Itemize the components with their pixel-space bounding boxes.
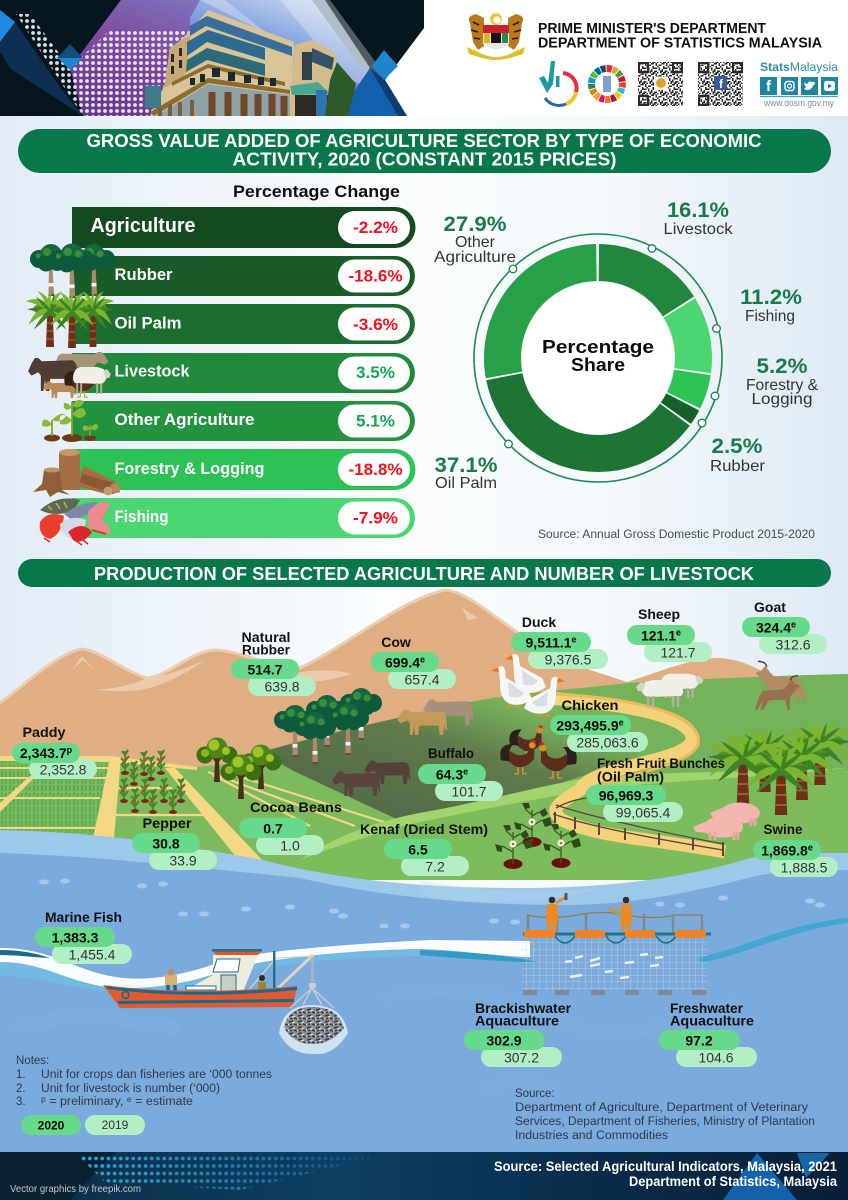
data: kenaf [360,821,488,876]
title band: gross value added [18,129,831,173]
data: freshwater aquaculture: 97.2 [685,1032,713,1048]
data: kenaf: 7.2 [425,858,445,874]
data: goat: 312.6 [775,636,811,652]
heading: percentage change: Percentage Change [233,183,400,201]
social media block [760,62,839,109]
data: duck: Duck [522,614,556,630]
data: buffalo: Buffalo [428,745,474,761]
winding farm road [547,698,725,852]
panel: percentage change bars [24,207,415,545]
vector credit: Vector graphics by freepik.com [10,1184,141,1195]
notes: e [127,1095,132,1104]
label: other agriculture share [434,213,516,266]
river bank [0,830,848,1160]
light foreground meadow [285,770,848,880]
data: freshwater aquaculture [659,1000,757,1067]
data: paddy: 2,352.8 [40,762,87,778]
source: departments: Source: [515,1088,555,1100]
water bubbles [39,878,825,928]
label: fishing share: Fishing [745,308,795,325]
data: fresh fruit bunches: 99,065.4 [616,804,670,820]
bar: other agriculture: Other Agriculture [114,410,254,429]
landscape illustration [0,590,848,1160]
source: departments: Industries and Commodities [515,1130,668,1142]
data: cow: Cow [381,634,411,650]
illustration: fence [553,798,723,856]
QR code: facebook: f [719,77,724,91]
label: rubber share [710,435,766,475]
data: buffalo: 64.3 [436,766,463,782]
icon: farm animals [28,352,111,398]
illustration: chickens [500,725,577,778]
data: cow: 699.4 [385,654,420,670]
data: duck: 9,511.1 [526,634,571,650]
label: other agriculture share: Other [455,234,496,251]
bar: fishing [40,498,415,545]
footer source text: Department of Statistics, Malaysia [629,1174,837,1189]
data: duck: e [571,634,576,644]
data: goat: e [791,620,796,630]
title band: gross value added: ACTIVITY, 2020 (CONSTANT 2015 PRICES) [232,150,616,170]
data: fresh fruit bunches: 96,969.3 [599,788,653,804]
data: goat: 324.4 [756,620,791,636]
notes: = estimate [132,1096,193,1108]
label: forestry and logging share [746,355,818,408]
data: pepper: 30.8 [152,836,180,852]
notes: 3. [16,1096,26,1108]
source: departments: Department of Agriculture, Department of Veterinary [515,1102,808,1114]
data: natural rubber: 514.7 [247,662,283,678]
donut centre label [542,337,654,375]
data: brackishwater aquaculture [464,1000,572,1067]
notes [16,1055,272,1108]
label: rubber share: 2.5% [712,435,763,458]
legend: years: 2019 [102,1118,129,1132]
bar: other agriculture [42,400,415,442]
data: sheep: 121.7 [660,644,696,660]
data: natural rubber [231,629,316,696]
shaded hillside [262,698,647,822]
data: sheep [627,606,712,662]
logo: statistics mark [539,61,577,105]
data: duck [511,614,608,669]
notes: = preliminary, [46,1096,127,1108]
notes: 2. [16,1083,26,1095]
label: other agriculture share: Agriculture [434,249,516,266]
data: buffalo: e [463,766,468,776]
illustration: goats [755,661,807,710]
data: pepper [132,815,217,870]
data: freshwater aquaculture: Aquaculture [670,1012,754,1028]
label: oil palm share [434,454,498,492]
data: natural rubber: Natural [242,629,290,645]
title band: production [18,559,831,587]
illustration: cows [397,700,473,735]
bar: fishing: -7.9% [353,508,398,528]
footer band [0,1152,848,1200]
notes: Unit for crops dan fisheries are ‘000 tonnes [41,1069,272,1081]
bar: livestock [28,352,415,398]
illustration: ducks [491,654,565,716]
data: pepper: Pepper [142,815,192,831]
bar: fishing: Fishing [114,507,168,526]
bar: rubber [30,244,415,298]
data: duck: 9,376.5 [545,652,592,668]
QR code: facebook [698,62,743,106]
icon: fish and seafood [40,498,110,545]
social media block: f [766,78,772,95]
label: livestock share: 16.1% [667,199,729,222]
QR code: website [638,62,683,106]
data: freshwater aquaculture: 104.6 [698,1050,734,1066]
data: marine fish [35,909,132,964]
data: chicken: e [619,718,624,728]
bar: forestry and logging: -18.8% [348,460,402,479]
data: marine fish: 1,455.4 [69,946,116,962]
data: chicken: Chicken [562,697,618,713]
label: forestry and logging share: Logging [752,391,812,408]
icon: rubber trees [30,244,115,298]
illustration: oil palm trees [702,717,848,815]
data: kenaf: 6.5 [408,842,428,858]
bar: livestock: Livestock [114,362,190,380]
label: forestry and logging share: Forestry & [746,377,818,394]
data: swine [753,821,838,877]
donut centre label: Share [571,355,625,375]
illustration: net of fish [279,983,348,1054]
bar: other agriculture: 5.1% [356,412,395,430]
data: cocoa beans: Cocoa Beans [250,799,342,815]
label: forestry and logging share: 5.2% [756,355,808,378]
data: marine fish: 1,383.3 [52,930,99,946]
icon: tree stumps and logs [33,449,120,497]
mountains [0,590,848,790]
data: sheep: e [676,628,681,638]
bar: rubber: Rubber [114,265,173,284]
data: swine: 1,888.5 [781,860,828,876]
data: pepper: 33.9 [169,852,197,868]
label: livestock share [664,199,734,238]
water [0,853,848,1160]
label: rubber share: Rubber [710,458,766,475]
illustration: buffalo [332,761,410,796]
bar: agriculture: -2.2% [353,218,398,237]
icon: oil palms [24,288,116,348]
building photo [145,10,356,116]
data: kenaf: Kenaf (Dried Stem) [360,821,488,837]
bar: forestry and logging: Forestry & Logging [114,459,264,478]
data: fresh fruit bunches: Fresh Fruit Bunches [597,755,725,771]
notes: 1. [16,1069,26,1081]
icon: seedlings [42,400,98,442]
data: brackishwater aquaculture: Brackishwater [475,1000,572,1016]
data: paddy: Paddy [22,724,66,740]
bar: oil palm: -3.6% [353,315,398,334]
data: paddy [12,724,97,779]
legend: years: 2020 [38,1118,65,1132]
notes: Unit for livestock is number (‘000) [41,1083,220,1095]
data: cocoa beans: 0.7 [263,820,283,836]
label: fishing share [740,286,802,325]
data: brackishwater aquaculture: 307.2 [504,1050,539,1066]
data: swine: Swine [764,821,803,837]
illustration: swine [693,802,760,840]
data: goat [742,599,827,654]
data: fresh fruit bunches: (Oil Palm) [597,768,664,784]
label: other agriculture share: 27.9% [444,213,507,236]
social media block: StatsMalaysia [760,62,839,74]
data: cocoa beans [239,799,342,855]
data: chicken [550,697,648,752]
department name: DEPARTMENT OF STATISTICS MALAYSIA [538,34,822,52]
donut centre label: Percentage [542,337,654,357]
banner geometric backdrop [0,0,424,116]
data: brackishwater aquaculture: 302.9 [486,1032,522,1048]
source: departments: Services, Department of Fisheries, Ministry of Plantation [515,1116,815,1128]
label: oil palm share: 37.1% [434,454,498,477]
illustration: kenaf plants [495,803,581,869]
logo: SDG wheel [592,68,622,100]
data: sheep: 121.1 [641,628,676,644]
notes: Notes: [16,1055,49,1067]
green hills [267,674,848,880]
label: oil palm share: Oil Palm [435,475,497,492]
legend: years [21,1115,145,1135]
illustration: aquaculture cage [522,893,711,995]
data: chicken: 285,063.6 [576,734,639,750]
label: fishing share: 11.2% [740,286,802,309]
bar: oil palm: Oil Palm [114,314,182,332]
crest [467,13,525,60]
illustration: sheep [636,674,703,707]
social media block: www.dosm.gov.my [763,98,834,109]
label: livestock share: Livestock [664,221,734,238]
data: brackishwater aquaculture: Aquaculture [475,1012,559,1028]
data: buffalo: 101.7 [451,784,487,800]
bar: forestry and logging [33,449,415,497]
department name: PRIME MINISTER'S DEPARTMENT [538,20,766,37]
ring markers [505,245,720,448]
department name [538,20,822,52]
data: marine fish: Marine Fish [45,909,122,925]
data: swine: 1,869.8 [761,842,808,858]
donut segments [502,262,694,454]
illustration: pepper plants [120,750,185,814]
data: natural rubber: Rubber [242,642,291,658]
footer source text: Source: Selected Agricultural Indicators, Malaysia, 2021 [494,1159,837,1174]
data: cow: e [420,654,425,664]
data: paddy: p [67,745,73,755]
bar: oil palm [24,288,415,348]
illustration: fishing boat [103,949,314,1008]
bar: agriculture: Agriculture [90,215,196,237]
data: natural rubber: 639.8 [264,678,300,694]
illustration: rubber trees [274,688,382,764]
bar: rubber: -18.6% [348,266,402,286]
title band: production: PRODUCTION OF SELECTED AGRICULTURE AND NUMBER OF LIVESTOCK [94,564,754,584]
illustration: cocoa trees [196,738,282,799]
data: paddy: 2,343.7 [20,745,67,761]
bar: livestock: 3.5% [356,363,395,382]
data: goat: Goat [754,599,786,615]
data: cocoa beans: 1.0 [280,838,300,854]
notes: p [41,1095,46,1104]
waves [0,880,848,994]
header banner [0,0,848,116]
data: cow: 657.4 [404,672,440,688]
data: swine: e [808,842,813,852]
title band: gross value added: GROSS VALUE ADDED OF AGRICULTURE SECTOR BY TYPE OF ECONOMIC [86,131,762,151]
data: chicken: 293,495.9 [556,718,619,734]
source: departments [515,1088,815,1142]
bar: agriculture [72,207,415,248]
data: fresh fruit bunches [586,755,725,822]
data: freshwater aquaculture: Freshwater [670,1000,744,1016]
data: sheep: Sheep [638,606,680,622]
rice and crop fields [0,756,420,880]
footer source text [494,1159,837,1189]
source: gross domestic product: Source: Annual Gross Domestic Product 2015-2020 [538,529,815,541]
data: buffalo [418,745,503,801]
donut chart: percentage share [474,234,722,482]
data: cow [371,634,456,689]
